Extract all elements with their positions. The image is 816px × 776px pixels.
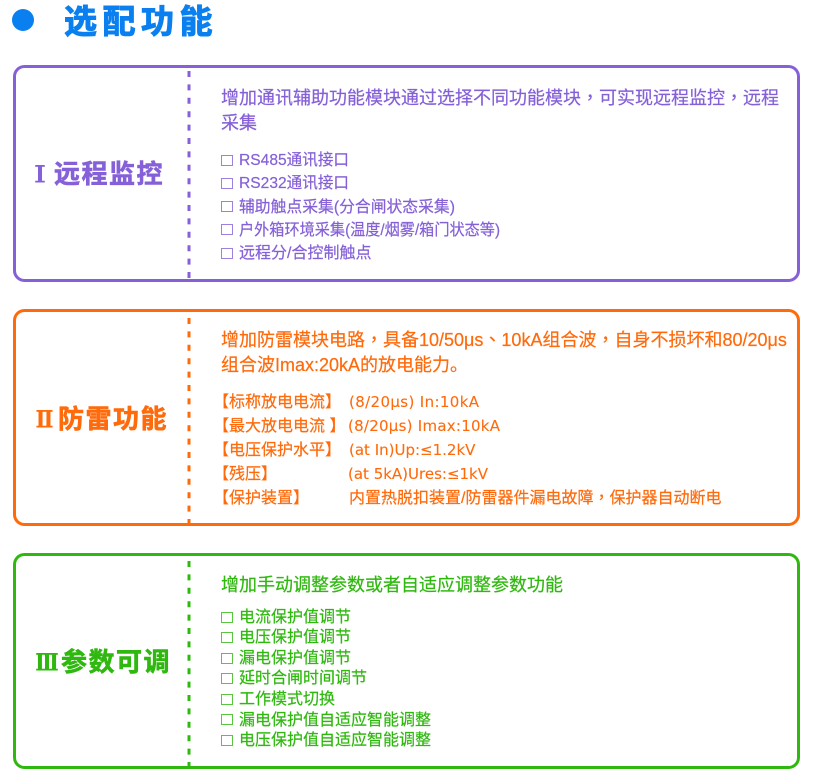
list: lightning protection specs: (8/20μs) In:10kA	[349, 393, 480, 411]
list: adjustable parameters: 漏电保护值自适应智能调整	[239, 710, 431, 729]
title: 选配功能: 选配功能	[64, 3, 218, 40]
list: lightning protection specs: (at In)Up:≤1.2kV	[349, 441, 476, 459]
text block: intro	[221, 326, 787, 375]
list: lightning protection specs	[213, 393, 721, 508]
text block: intro: 组合波Imax:20kA的放电能力。	[221, 355, 468, 375]
list: adjustable parameters: 电压保护值调节	[239, 628, 351, 646]
list: lightning protection specs: 【最大放电电流 】	[213, 417, 345, 435]
heading: 参数可调: Ⅲ	[36, 650, 58, 675]
list: adjustable parameters: 电压保护值自适应智能调整	[239, 730, 431, 749]
text block: intro: 采集	[221, 113, 257, 133]
list: lightning protection specs: 【保护装置】	[213, 489, 309, 507]
text block: intro: 增加防雷模块电路，具备10/50μs、10kA组合波，自身不损坏和80/20μs	[221, 326, 787, 352]
list: adjustable parameters	[222, 608, 431, 749]
heading: 远程监控: Ⅰ	[29, 162, 51, 187]
panel: 参数可调	[14, 554, 798, 768]
heading: 防雷功能: Ⅱ	[34, 407, 56, 432]
heading: 防雷功能: 防雷功能	[58, 404, 168, 434]
list: lightning protection specs: (8/20μs) Imax:10kA	[348, 417, 501, 435]
list: remote monitoring options: 户外箱环境采集(温度/烟雾/箱门状态等)	[239, 220, 500, 239]
heading: 远程监控: 远程监控	[54, 159, 164, 189]
text block: intro	[221, 84, 779, 133]
list: remote monitoring options: RS232通讯接口	[239, 174, 349, 192]
list: remote monitoring options	[222, 151, 500, 262]
list: lightning protection specs: 【电压保护水平】	[213, 441, 341, 459]
list: remote monitoring options: RS485通讯接口	[239, 151, 349, 169]
panel: 防雷功能	[14, 310, 798, 524]
list: adjustable parameters: 电流保护值调节	[239, 608, 351, 626]
text block: intro: 增加手动调整参数或者自适应调整参数功能	[221, 575, 563, 595]
heading: 参数可调: 参数可调	[61, 647, 171, 677]
list: lightning protection specs: (at 5kA)Ures:≤1kV	[348, 465, 489, 483]
list: adjustable parameters: 工作模式切换	[239, 690, 335, 708]
list: lightning protection specs: 【残压】	[213, 465, 277, 483]
list: lightning protection specs: 内置热脱扣装置/防雷器件漏电故障，保护器自动断电	[349, 484, 721, 508]
list: adjustable parameters: 延时合闸时间调节	[239, 669, 367, 687]
list: remote monitoring options: 远程分/合控制触点	[239, 244, 371, 262]
list: adjustable parameters: 漏电保护值调节	[239, 649, 351, 667]
panel: 远程监控	[14, 66, 798, 280]
text block: intro: 增加通讯辅助功能模块通过选择不同功能模块，可实现远程监控，远程	[221, 84, 779, 110]
list: lightning protection specs: 【标称放电电流】	[213, 393, 341, 411]
list: remote monitoring options: 辅助触点采集(分合闸状态采集)	[239, 198, 455, 216]
